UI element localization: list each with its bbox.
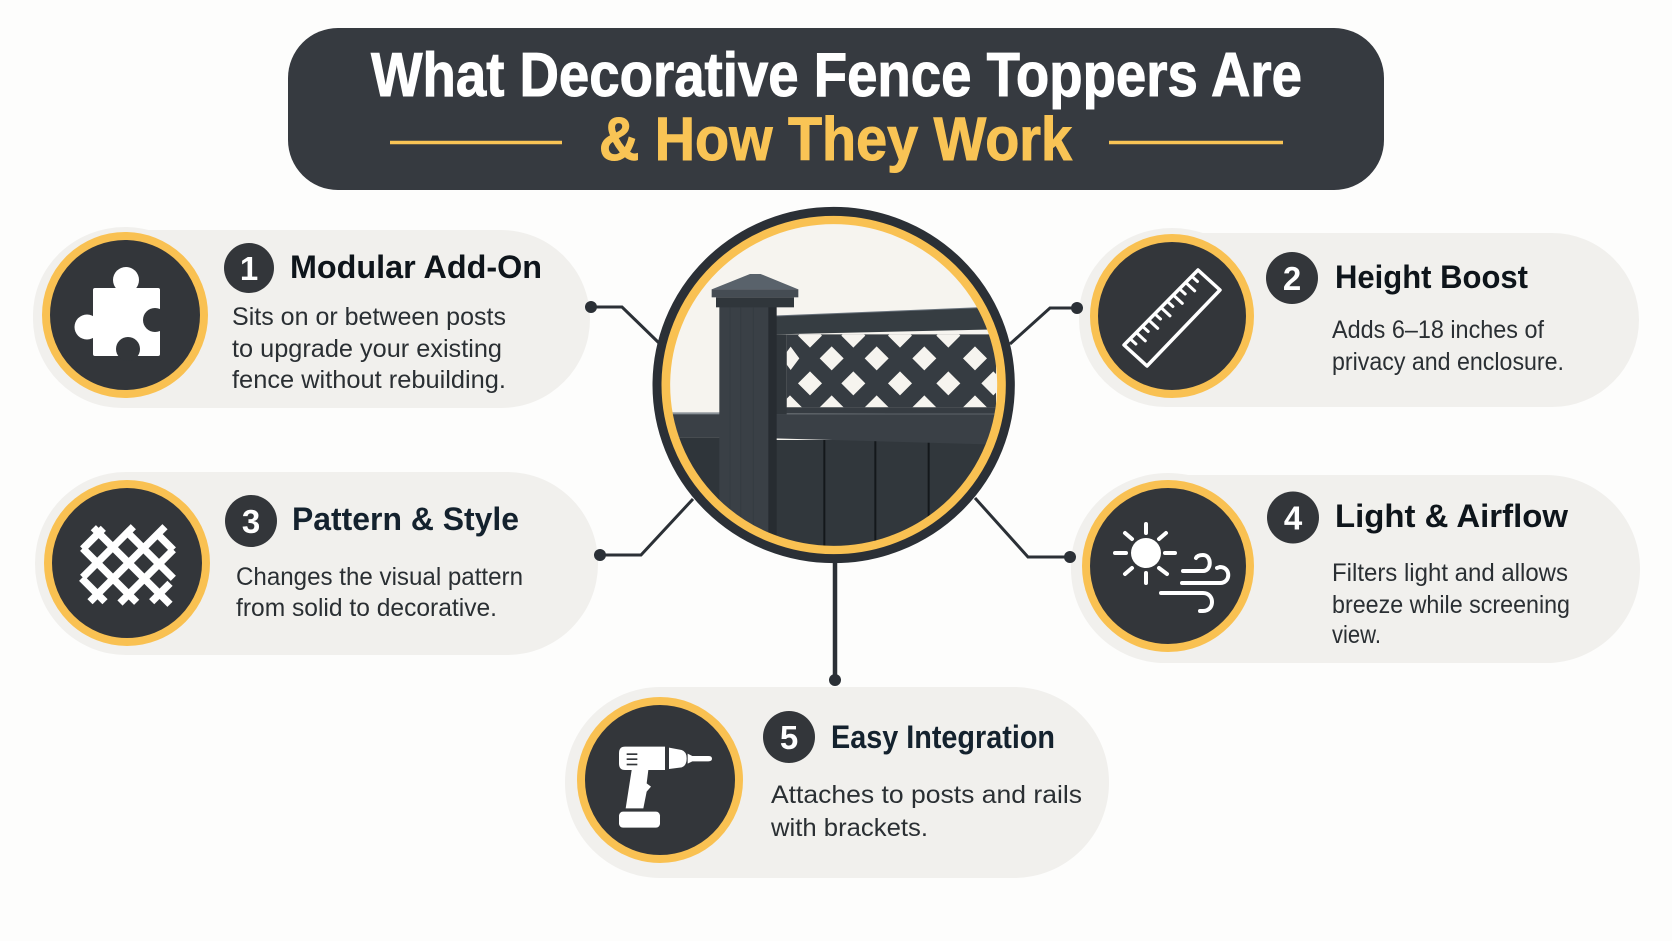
description <box>232 303 506 394</box>
icon: lattice <box>48 484 206 642</box>
lattice panel <box>786 334 996 408</box>
connector: item 4 <box>975 498 1076 563</box>
description: to upgrade your existing <box>232 335 502 363</box>
description: Filters light and allows <box>1332 559 1568 587</box>
title line 1: What Decorative Fence Toppers Are <box>371 41 1302 110</box>
number badge 5 <box>763 711 815 763</box>
description: privacy and enclosure. <box>1332 348 1564 376</box>
number badge 4 <box>1267 492 1319 544</box>
number badge 1: 1 <box>240 250 258 287</box>
heading: Light & Airflow <box>1335 498 1568 534</box>
heading: Modular Add-On <box>290 249 542 285</box>
left rail <box>670 414 720 437</box>
description: breeze while screening <box>1332 591 1570 619</box>
description: Adds 6–18 inches of <box>1332 316 1544 344</box>
description: with brackets. <box>770 814 928 842</box>
heading: Height Boost <box>1335 259 1528 295</box>
icon: sun and wind <box>1086 484 1250 648</box>
number badge 3 <box>225 495 277 547</box>
description <box>770 781 1082 842</box>
connector: item 1 <box>585 301 659 343</box>
number badge 2 <box>1266 252 1318 304</box>
title banner <box>288 28 1384 190</box>
icon: puzzle piece <box>46 236 204 394</box>
description: Changes the visual pattern <box>236 563 523 591</box>
number badge 2: 2 <box>1283 260 1301 297</box>
number badge 3: 3 <box>242 503 260 540</box>
top rail <box>775 307 997 334</box>
post cap <box>712 274 798 289</box>
heading: Pattern & Style <box>292 501 519 537</box>
panel: item 2 height boost <box>1079 228 1639 407</box>
connector: item 3 <box>594 499 693 561</box>
panel: item 3 pattern and style <box>35 472 598 655</box>
number badge 5: 5 <box>780 719 798 756</box>
central fence photo <box>657 211 1010 559</box>
description <box>236 563 523 622</box>
description <box>1332 316 1564 376</box>
icon: ruler <box>1094 238 1250 394</box>
connector: item 2 <box>1010 302 1083 344</box>
connector: item 5 <box>829 562 841 686</box>
description: view. <box>1332 621 1381 649</box>
number badge 4: 4 <box>1284 500 1303 536</box>
post <box>719 307 769 553</box>
description: Attaches to posts and rails <box>771 781 1082 809</box>
lattice side strip <box>776 334 787 414</box>
heading: Easy Integration <box>831 719 1055 755</box>
panel: item 4 light and airflow <box>1071 473 1640 663</box>
panel: item 5 easy integration <box>565 687 1109 878</box>
icon: power drill <box>581 701 739 859</box>
title line 2: & How They Work <box>599 105 1072 173</box>
description: from solid to decorative. <box>236 594 497 622</box>
number badge 1 <box>224 243 274 293</box>
solid fence boards <box>775 440 992 553</box>
description: Sits on or between posts <box>232 303 506 331</box>
description: fence without rebuilding. <box>232 366 506 394</box>
panel: item 1 modular add-on <box>33 227 590 408</box>
description <box>1332 559 1570 649</box>
lower rail <box>775 413 997 445</box>
